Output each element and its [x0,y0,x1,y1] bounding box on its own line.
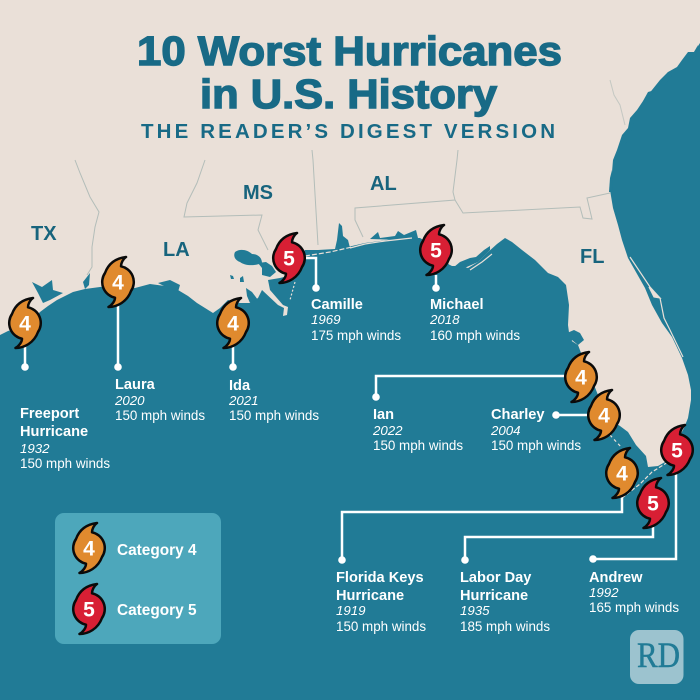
state labels: AL [370,173,397,195]
label: Andrew [589,570,679,615]
icon: Ida hurricane [217,298,249,348]
label: Andrew: 165 mph winds [589,600,679,615]
state labels: TX [31,223,57,245]
icon: Michael hurricane [420,225,452,275]
subtitle: THE READER’S DIGEST VERSION [141,120,555,143]
label: Freeport Hurricane: 150 mph winds [20,456,110,471]
label: Charley: 2004 [490,423,521,438]
label: Ida [228,378,319,423]
label: Florida Keys Hurricane: Florida Keys [336,570,424,586]
label: Camille [311,297,401,343]
icon: Florida Keys hurricane: 4 [616,462,628,486]
icon: category 5: 5 [83,598,95,622]
title [137,28,562,117]
label: Laura: Laura [115,377,156,393]
label: Freeport Hurricane: 1932 [20,441,50,456]
label: Labor Day Hurricane: 1935 [460,603,490,618]
state labels [31,173,604,268]
label: Labor Day Hurricane: 185 mph winds [460,619,550,634]
icon: Michael hurricane: 5 [430,240,442,262]
title: 10 Worst Hurricanes [137,28,562,74]
label: Florida Keys Hurricane: 150 mph winds [336,619,426,634]
label: Florida Keys Hurricane [336,570,426,634]
label: Ian [372,407,463,453]
icon: category 4: 4 [83,538,95,560]
label: Ida: Ida [229,378,251,394]
logo: RD: RD [637,635,680,675]
label: Andrew: 1992 [589,585,619,600]
label: Michael: Michael [430,297,484,313]
label: Michael: 2018 [429,312,460,327]
connector lines [21,258,676,564]
label: Andrew: Andrew [589,570,643,586]
icon: Andrew hurricane [661,425,693,475]
legend text: category 4: Category 4 [117,542,197,559]
logo: RD [630,630,684,684]
icon: Laura hurricane: 4 [112,272,124,294]
label: Freeport Hurricane: Freeport [20,406,79,422]
label: Ian: 2022 [372,423,403,438]
label: Ida: 150 mph winds [229,408,319,423]
label: Charley: Charley [491,407,545,423]
label: Camille: 1969 [311,312,341,327]
icon: Camille hurricane: 5 [283,248,295,270]
icon: Charley hurricane [588,390,620,440]
icon: Freeport hurricane: 4 [19,312,31,336]
label: Charley [490,407,581,453]
label: Laura: 2020 [114,393,145,408]
label: Laura [114,377,205,423]
map: bays and lakes [32,45,698,350]
label: Freeport Hurricane [20,406,110,471]
label: Laura: 150 mph winds [115,408,205,423]
title: in U.S. History [200,71,497,117]
legend text: category 5: Category 5 [117,602,197,619]
state labels: MS [243,182,273,204]
label: Charley: 150 mph winds [491,438,581,453]
icon: Charley hurricane: 4 [598,404,610,428]
panel: legend [55,513,221,644]
icon: category 5 [73,584,105,634]
icon: Camille hurricane [273,233,305,283]
icon: Ian hurricane: 4 [575,366,587,390]
label: Michael: 160 mph winds [430,328,520,343]
state labels: LA [163,239,190,261]
map: barrier islands [290,238,683,498]
icon: Laura hurricane [102,257,134,307]
icon: Labor Day hurricane: 5 [647,492,659,516]
label: Labor Day Hurricane: Labor Day [460,570,532,586]
label: Camille: 175 mph winds [311,328,401,343]
label: Camille: Camille [311,297,363,313]
label: Labor Day Hurricane [460,570,550,634]
state labels: FL [580,246,604,268]
map: Gulf coast land [0,0,700,498]
label: Florida Keys Hurricane: 1919 [336,603,366,618]
icon: category 4 [73,523,105,573]
icon: Freeport hurricane [9,298,41,348]
icon: Ida hurricane: 4 [227,312,239,336]
icon: Florida Keys hurricane [606,448,638,498]
label: Florida Keys Hurricane: Hurricane [336,588,404,604]
label: Labor Day Hurricane: Hurricane [460,588,528,604]
icon: Ian hurricane [565,352,597,402]
label: Michael [429,297,520,343]
icon: Andrew hurricane: 5 [671,440,683,462]
label: Ian: 150 mph winds [373,438,463,453]
map: state borders [75,80,625,275]
label: Ian: Ian [373,407,394,423]
icon: Labor Day hurricane [637,478,669,528]
label: Freeport Hurricane: Hurricane [20,424,88,440]
label: Ida: 2021 [228,393,259,408]
